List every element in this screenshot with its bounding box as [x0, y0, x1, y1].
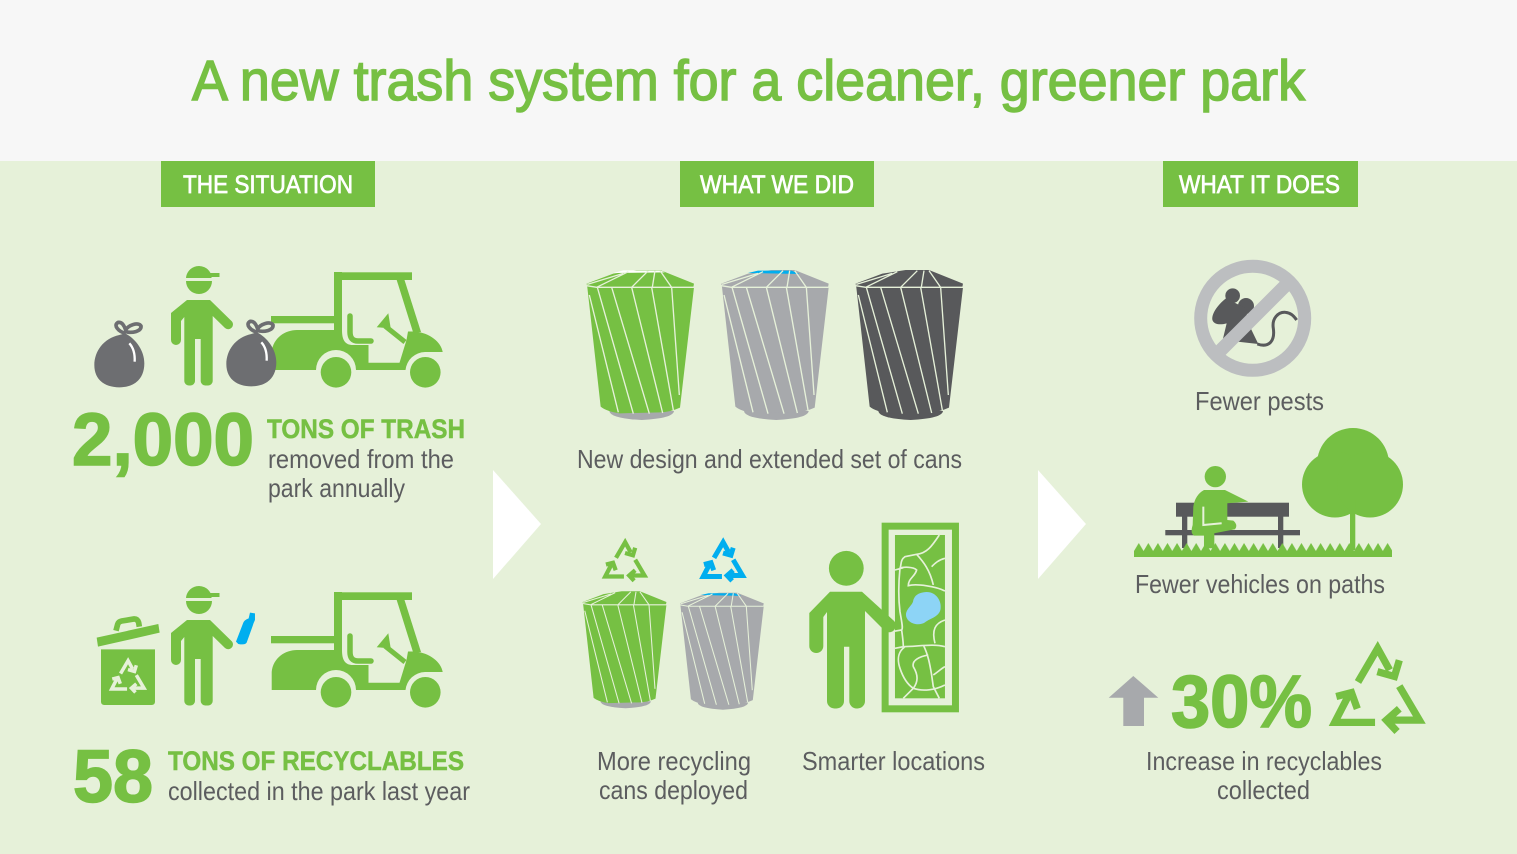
- text: increase in recyclables: Increase in recyclables: [1146, 746, 1382, 776]
- text: increase in recyclables: [1146, 746, 1382, 805]
- icon: trash bag right: [226, 321, 276, 386]
- text: new design: New design and extended set of cans: [577, 444, 962, 474]
- panel: what we did: [577, 270, 985, 805]
- icon: utility cart 2: [271, 592, 443, 708]
- icon: no pests: [1201, 266, 1305, 370]
- icon: park map: [882, 523, 959, 712]
- panel: the situation: [72, 266, 470, 818]
- text: smarter locations: Smarter locations: [802, 746, 985, 776]
- text: increase in recyclables: collected: [1217, 775, 1310, 805]
- icon: up arrow: [1109, 676, 1158, 726]
- icon: tree: [1302, 428, 1403, 550]
- text: removed from the park annually: [268, 444, 454, 503]
- icon: small green can: [583, 591, 666, 708]
- icon: large recycling symbol: [1335, 648, 1419, 731]
- stat: 30%: 30%: [1171, 660, 1312, 743]
- icon: sitting person: [1192, 466, 1248, 548]
- icon: grey can: [721, 270, 829, 420]
- heading: the situation: THE SITUATION: [183, 171, 353, 199]
- text: collected in the park: collected in the park last year: [168, 776, 470, 806]
- header band: [0, 0, 1517, 161]
- text: fewer vehicles: Fewer vehicles on paths: [1135, 569, 1385, 599]
- heading: what we did: [680, 161, 874, 207]
- icon: small grey can: [680, 593, 764, 710]
- heading: the situation: [161, 161, 375, 207]
- panel: what it does: [1109, 266, 1419, 805]
- icon: worker with bottle: [171, 586, 255, 706]
- arrow: situation to action: [493, 470, 541, 579]
- text: removed from the park annually: removed from the: [268, 444, 454, 474]
- arrow: action to result: [1038, 470, 1086, 579]
- heading: what we did: WHAT WE DID: [700, 171, 854, 199]
- text: more recycling cans deployed: More recycling: [597, 746, 751, 776]
- icon: dark can: [856, 270, 963, 420]
- text: removed from the park annually: park annually: [268, 473, 405, 503]
- text: more recycling cans deployed: [597, 746, 751, 805]
- icon: worker: [171, 266, 233, 386]
- icon: person at map: [809, 551, 896, 708]
- stat: 2,000: 2,000: [72, 398, 254, 481]
- heading: what it does: [1163, 161, 1358, 207]
- heading: what it does: WHAT IT DOES: [1179, 171, 1340, 199]
- icon: grass: [1134, 543, 1392, 557]
- icon: green can: [587, 270, 694, 420]
- stat label: tons of recyclables: TONS OF RECYCLABLES: [168, 746, 464, 776]
- icon: blue recycling symbol: [703, 542, 742, 581]
- icon: green recycling symbol: [605, 542, 644, 581]
- icon: utility cart: [271, 272, 443, 388]
- icon: bench: [1165, 503, 1300, 548]
- text: fewer pests: Fewer pests: [1195, 386, 1324, 416]
- title: A new trash system for a cleaner, greener park: [192, 49, 1305, 113]
- text: more recycling cans deployed: cans deployed: [599, 775, 748, 805]
- stat label: tons of trash: TONS OF TRASH: [267, 414, 465, 444]
- icon: trash bag left: [94, 322, 144, 387]
- stat: 58: 58: [73, 735, 153, 818]
- icon: recycling bin: [97, 619, 160, 705]
